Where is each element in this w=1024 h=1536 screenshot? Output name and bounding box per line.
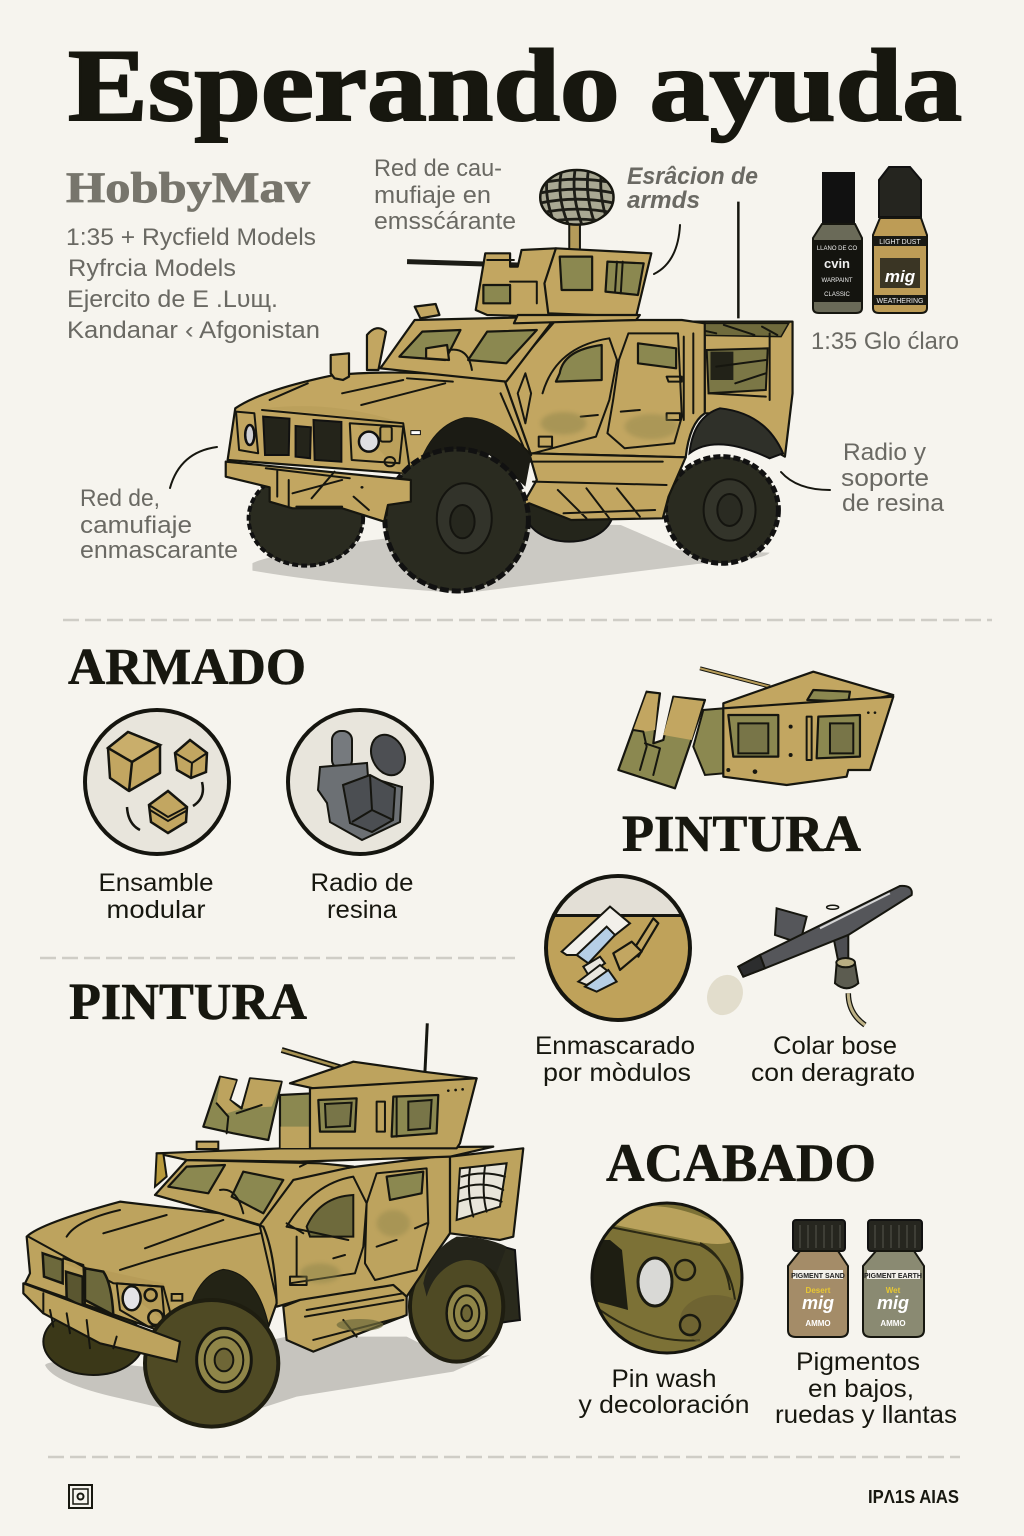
- callout: resin radio: de resina: [842, 490, 945, 517]
- bottle: sand pigment: PIGMENT SAND: [791, 1273, 845, 1280]
- kit details text: [66, 224, 320, 344]
- callout: camouflage net top: [374, 155, 516, 235]
- pigment bottles: [788, 1220, 924, 1337]
- bottle: grey pigment: mig: [877, 1293, 909, 1313]
- brand heading: HobbyMav: [66, 165, 311, 212]
- kit details text: 1:35 + Rycfield Models: [66, 224, 316, 251]
- hood and front: [228, 373, 531, 482]
- bottle: dark: [813, 172, 862, 313]
- label: base coat: Colar bose: [773, 1032, 897, 1060]
- callout: resin radio: Radio y: [843, 439, 926, 466]
- label: pin wash: y decoloración: [578, 1391, 750, 1419]
- icon: airbrush: [701, 886, 912, 1025]
- title: Esperando ayuda: [68, 29, 962, 143]
- rear mudguard: [689, 408, 783, 458]
- bottle: dark: LLANO DE CO: [817, 246, 857, 252]
- camouflage net ball: [539, 170, 615, 250]
- callout: camouflage net: enmascarante: [80, 537, 238, 564]
- label: module masking: por mòdulos: [543, 1059, 691, 1087]
- label: pigments: [775, 1348, 957, 1429]
- caption: bottles: 1:35 Glo ćlaro: [811, 328, 959, 355]
- front bumper: [226, 462, 411, 522]
- second vehicle illustration: [23, 1023, 523, 1427]
- arrow: weapons station: [654, 225, 680, 274]
- ground shadow: [252, 523, 770, 593]
- bottle: gold: WEATHERING: [877, 298, 923, 305]
- callout: weapons station: Esrâcion de: [627, 163, 758, 190]
- heading: acabado: ACABADO: [606, 1133, 876, 1193]
- sill and steps: [283, 1285, 407, 1352]
- rear wheel: [665, 457, 778, 563]
- wheel arch: [183, 1270, 268, 1342]
- callout: resin radio: soporte: [841, 465, 929, 492]
- label: modular assembly: modular: [106, 896, 206, 924]
- kit details text: Ryfrcia Models: [68, 255, 236, 282]
- sill and steps: [522, 453, 686, 520]
- grille vents: [263, 417, 341, 462]
- callout: camouflage net top: Red de cau-: [374, 155, 502, 182]
- icon: modular assembly: [85, 710, 229, 854]
- far wheels: [525, 482, 613, 542]
- bottle: grey pigment: [863, 1220, 924, 1337]
- antenna: [737, 202, 740, 318]
- footer icon: [69, 1485, 92, 1508]
- heading: armado: ARMADO: [68, 639, 306, 696]
- label: pin wash: [578, 1365, 750, 1419]
- cab side body: [504, 320, 705, 457]
- front wheel: [385, 449, 528, 591]
- label: pigments: Pigmentos: [796, 1348, 920, 1376]
- mudflap: [490, 1243, 520, 1323]
- label: modular assembly: Ensamble: [98, 869, 214, 897]
- callout: camouflage net top: mufiaje en: [374, 182, 491, 209]
- gun shield: [203, 1077, 282, 1140]
- mirrors: [367, 328, 386, 370]
- grille: [43, 1253, 113, 1315]
- headlights: [117, 1283, 182, 1327]
- bottle: gold: LIGHT DUST: [879, 239, 921, 246]
- front bumper: [23, 1283, 180, 1362]
- hood and front: [25, 1202, 277, 1342]
- callout: camouflage net top: emssćárante: [374, 208, 516, 235]
- weathering on side: [541, 412, 586, 435]
- label: pin wash: Pin wash: [612, 1365, 716, 1393]
- windshield frame: [380, 317, 556, 382]
- bottle: sand pigment: Desert: [806, 1286, 831, 1295]
- turret: [407, 248, 651, 323]
- gun barrel: [407, 262, 518, 265]
- bottle: gold: [873, 167, 927, 313]
- headlights: [236, 412, 420, 466]
- icon: resin radio: [288, 710, 432, 854]
- bottle: dark: cvin: [824, 256, 850, 271]
- label: module masking: Enmascarado: [535, 1032, 695, 1060]
- rear arch: [423, 1237, 507, 1297]
- label: modular assembly: [98, 869, 214, 924]
- callout: camouflage net: Red de,: [80, 485, 160, 512]
- icon: pin wash close-up: [590, 1203, 750, 1353]
- callout: resin radio: [841, 439, 945, 517]
- kit details text: Kandanar ‹ Afgonistan: [67, 317, 320, 344]
- bottle: sand pigment: AMMO: [805, 1319, 831, 1328]
- callout: weapons station: armds: [627, 187, 700, 214]
- label: pigments: en bajos,: [808, 1375, 914, 1403]
- label: resin radio: [310, 869, 414, 924]
- wheel arch: [411, 418, 531, 487]
- turret: [280, 1050, 477, 1148]
- label: module masking: [535, 1032, 695, 1087]
- antenna: [425, 1023, 427, 1072]
- icon: module masking: [540, 870, 700, 1020]
- bottle: sand pigment: mig: [802, 1293, 834, 1313]
- bottle: grey pigment: Wet: [886, 1286, 901, 1295]
- bottle: grey pigment: AMMO: [880, 1319, 906, 1328]
- bottle: dark: CLASSIC: [824, 292, 850, 298]
- label: base coat: [751, 1032, 915, 1087]
- label: pigments: ruedas y llantas: [775, 1401, 957, 1429]
- label: resin radio: resina: [327, 896, 397, 924]
- windshield frame: [155, 1160, 353, 1225]
- main vehicle illustration: [226, 170, 793, 593]
- front wheel: [145, 1300, 278, 1427]
- heading: pintura right: PINTURA: [622, 806, 861, 863]
- cargo bed: [678, 322, 793, 457]
- kit details text: Ejercito de E .Lυщ.: [67, 286, 278, 313]
- label: base coat: con deragrato: [751, 1059, 915, 1087]
- rear wheel: [410, 1252, 503, 1362]
- callout: camouflage net: [80, 485, 238, 564]
- cargo bed: [450, 1148, 523, 1240]
- heading: pintura left: PINTURA: [69, 974, 307, 1031]
- bottle: dark: WARPAINT: [822, 278, 853, 284]
- footer credit: IPΛ1S AIAS: [868, 1487, 959, 1507]
- paint bottles top: [813, 167, 927, 313]
- bottle: grey pigment: PIGMENT EARTH: [864, 1273, 922, 1280]
- far wheels: [43, 1308, 143, 1375]
- bottle: sand pigment: [788, 1220, 848, 1337]
- cab side body: [260, 1155, 450, 1307]
- arrow: resin radio: [781, 472, 830, 490]
- callout: weapons station: [627, 163, 758, 214]
- roof: [157, 1147, 493, 1162]
- ground shadow: [45, 1337, 490, 1422]
- callout: camouflage net: camufiaje: [80, 512, 192, 539]
- bottle: gold: mig: [885, 267, 916, 286]
- turret module: [618, 668, 893, 788]
- label: resin radio: Radio de: [310, 869, 414, 897]
- doors: [533, 333, 693, 453]
- arrow: camouflage net: [170, 447, 217, 488]
